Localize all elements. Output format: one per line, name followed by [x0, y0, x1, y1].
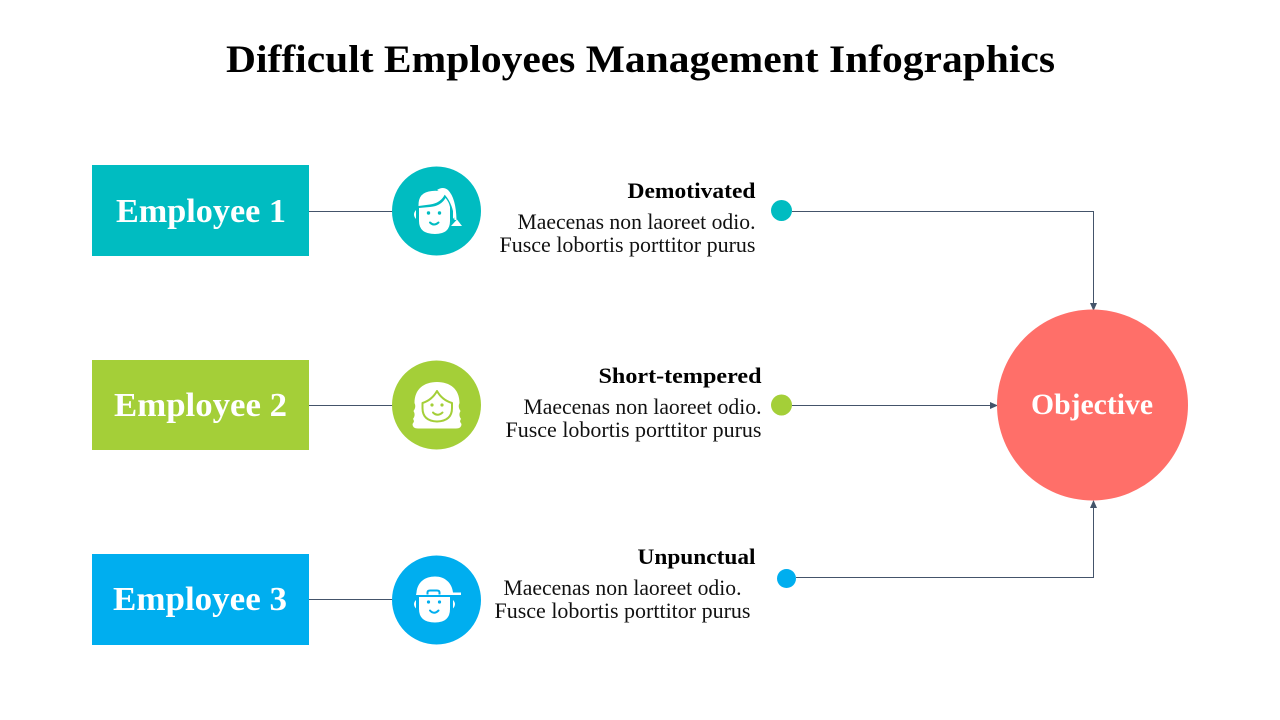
text block: Demotivated: Maecenas non laoreet odio.	[518, 209, 756, 234]
text block: Demotivated	[500, 178, 756, 257]
text block: Short-tempered: Fusce lobortis porttitor purus	[506, 417, 762, 442]
label: Employee 1: Employee 1	[116, 193, 286, 230]
objective circle: Objective	[1031, 388, 1153, 421]
panel: employee 2 row	[92, 360, 998, 450]
objective circle	[997, 310, 1188, 500]
connector: employee 2 to icon	[309, 404, 393, 406]
text block: Short-tempered: Short-tempered	[598, 363, 762, 388]
text block: Demotivated: Demotivated	[628, 178, 756, 203]
label: Employee 3	[92, 554, 309, 645]
text block: Unpunctual: Fusce lobortis porttitor purus	[494, 598, 750, 623]
dot: employee 3	[777, 569, 796, 588]
title: Difficult Employees Management Infographics	[226, 38, 1055, 81]
label: Employee 3: Employee 3	[113, 581, 287, 618]
text block: Unpunctual: Unpunctual	[638, 544, 756, 569]
text block: Short-tempered: Maecenas non laoreet odio.	[524, 394, 762, 419]
icon: woman with ponytail	[392, 166, 481, 256]
connector: employee 3 to icon	[309, 598, 393, 600]
label: Employee 1	[92, 165, 309, 256]
label: Employee 2: Employee 2	[114, 387, 287, 424]
text block: Unpunctual	[494, 544, 756, 623]
text block: Demotivated: Fusce lobortis porttitor purus	[500, 232, 756, 257]
text block: Short-tempered	[506, 363, 762, 442]
arrow: Short-tempered to Objective	[792, 402, 998, 409]
connector: employee 1 to icon	[309, 210, 393, 212]
arrow: Demotivated to Objective	[792, 212, 1097, 311]
label: Employee 2	[92, 360, 309, 450]
dot: employee 1	[771, 200, 792, 221]
panel: employee 1 row	[92, 165, 1097, 311]
arrow: Unpunctual to Objective	[796, 500, 1097, 578]
icon: man with cap	[392, 556, 481, 644]
dot: employee 2	[771, 394, 792, 416]
icon: woman with curly hair	[392, 360, 481, 450]
panel: employee 3 row	[92, 500, 1097, 645]
text block: Unpunctual: Maecenas non laoreet odio.	[504, 575, 742, 600]
